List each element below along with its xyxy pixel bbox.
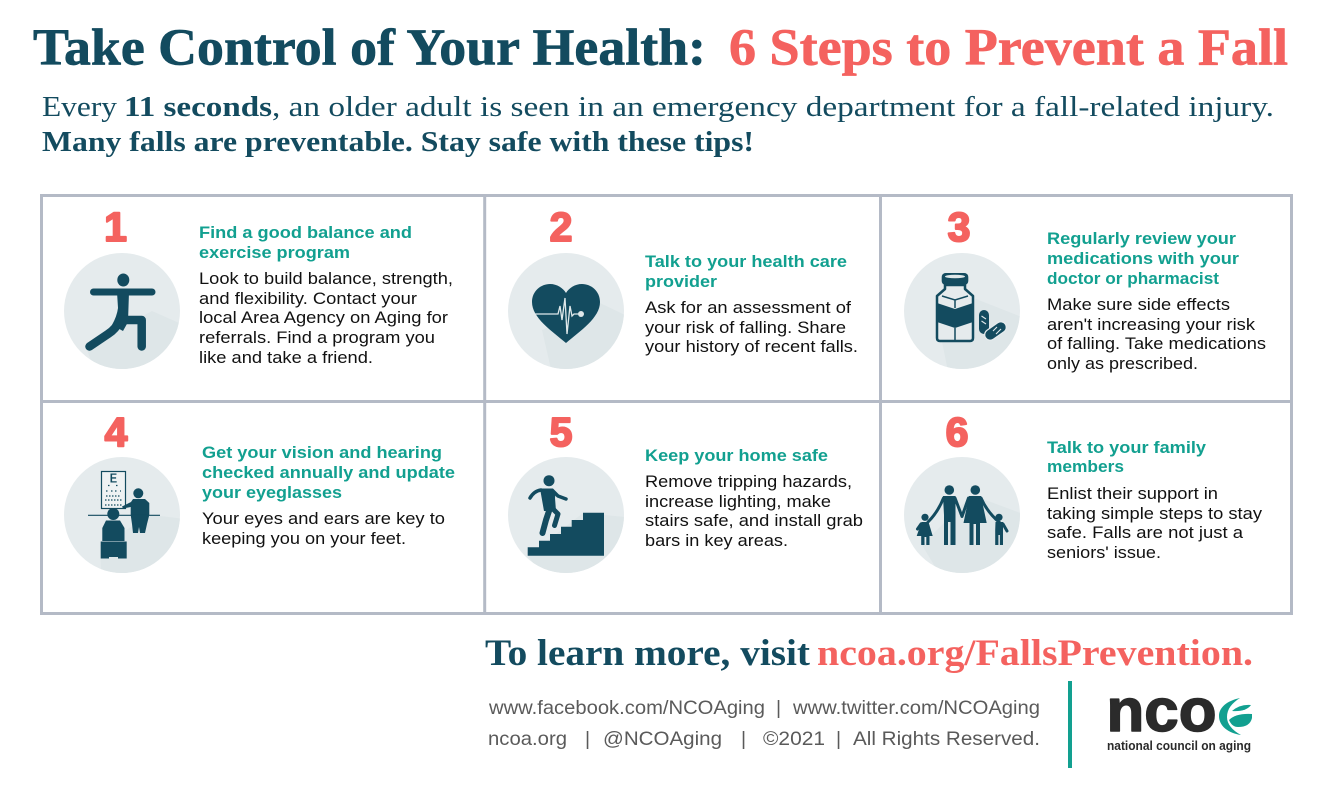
body text 3 [1047, 296, 1266, 373]
body text 2: your risk of falling. Share [645, 319, 846, 337]
body text 2 [645, 299, 858, 356]
heading 1: Find a good balance and [199, 224, 412, 242]
body text 6: seniors' issue. [1047, 544, 1161, 562]
body text 5: stairs safe, and install grab [645, 512, 863, 530]
icon: person climbing stairs [508, 457, 624, 573]
intro text: , an older adult is seen in an emergency department for a fall-related injury. [272, 92, 1274, 123]
body text 1: referrals. Find a program you [199, 329, 435, 347]
heading 6 [1047, 439, 1207, 476]
body text 1 [199, 270, 453, 367]
panel: step 1 balance and exercise [64, 212, 452, 369]
social links and copyright: | [836, 728, 841, 750]
body text 1: Look to build balance, strength, [199, 270, 453, 288]
intro text: Many falls are preventable. Stay safe with these tips! [42, 127, 754, 158]
logo divider [1068, 681, 1072, 768]
social links and copyright: @NCOAging [603, 728, 722, 750]
body text 4: Your eyes and ears are key to [202, 510, 445, 528]
heading 2: provider [645, 273, 718, 291]
body text 2: your history of recent falls. [645, 338, 858, 356]
body text 6 [1047, 485, 1263, 562]
social links and copyright: | [741, 728, 746, 750]
heading 6: members [1047, 458, 1124, 476]
heading 1 [199, 224, 412, 262]
heading 5: Keep your home safe [645, 447, 828, 465]
logo: NCOA: nco [1106, 677, 1216, 744]
body text 3: aren't increasing your risk [1047, 316, 1256, 334]
title [33, 20, 1288, 76]
heading 2: Talk to your health care [645, 253, 847, 271]
body text 5: increase lighting, make [645, 493, 831, 511]
heading 3: doctor or pharmacist [1047, 270, 1220, 288]
number 4: 4 [105, 409, 128, 455]
call to action: To learn more, visit [485, 633, 811, 674]
title: 6 Steps to Prevent a Fall [729, 20, 1288, 76]
icon: heart with pulse [508, 253, 624, 369]
logo: NCOA [1106, 677, 1252, 753]
body text 2: Ask for an assessment of [645, 299, 851, 317]
social links and copyright: www.twitter.com/NCOAging [792, 697, 1040, 719]
body text 6: taking simple steps to stay [1047, 505, 1263, 523]
social links and copyright: www.facebook.com/NCOAging [488, 697, 765, 719]
intro text: Every [42, 92, 117, 123]
heading 3: medications with your [1047, 250, 1240, 268]
number 3: 3 [948, 204, 970, 250]
social links and copyright [488, 697, 1040, 750]
panel: step 5 home safety [508, 417, 862, 573]
body text 3: only as prescribed. [1047, 355, 1198, 373]
call to action: ncoa.org/FallsPrevention. [817, 633, 1253, 674]
body text 1: like and take a friend. [199, 349, 373, 367]
body text 5: bars in key areas. [645, 532, 788, 550]
number 2: 2 [550, 204, 572, 250]
body text 3: Make sure side effects [1047, 296, 1230, 314]
heading 4: checked annually and update [202, 464, 455, 482]
body text 4: keeping you on your feet. [202, 530, 406, 548]
icon: family holding hands [904, 457, 1020, 573]
body text 1: and flexibility. Contact your [199, 290, 418, 308]
body text 5 [645, 473, 863, 550]
heading 1: exercise program [199, 244, 350, 262]
body text 6: Enlist their support in [1047, 485, 1218, 503]
heading 4: Get your vision and hearing [202, 444, 442, 462]
body text 3: of falling. Take medications [1047, 335, 1266, 353]
icon: pill bottle and capsules [904, 253, 1020, 369]
body text 6: safe. Falls are not just a [1047, 524, 1244, 542]
panel: step 3 medications [904, 212, 1266, 372]
social links and copyright: ©2021 [763, 728, 825, 750]
panel: step 4 vision and hearing [64, 417, 454, 573]
number 5: 5 [550, 409, 572, 455]
logo: NCOA: national council on aging [1107, 739, 1251, 753]
heading 4: your eyeglasses [202, 484, 342, 502]
social links and copyright: | [585, 728, 590, 750]
heading 2 [645, 253, 847, 291]
body text 1: local Area Agency on Aging for [199, 309, 449, 327]
panel: step 2 health care provider [508, 212, 856, 369]
call to action [485, 633, 1253, 674]
intro text: 11 seconds [124, 92, 272, 123]
heading 6: Talk to your family [1047, 439, 1207, 457]
number 6: 6 [946, 409, 968, 455]
heading 3 [1047, 230, 1240, 288]
heading 3: Regularly review your [1047, 230, 1237, 248]
panel: step 6 family [904, 416, 1262, 573]
heading 4 [202, 444, 455, 502]
icon: exercise pose [64, 253, 180, 369]
social links and copyright: All Rights Reserved. [853, 728, 1040, 750]
social links and copyright: | [776, 697, 781, 719]
number 1: 1 [104, 204, 127, 250]
intro text [42, 92, 1274, 158]
body text 5: Remove tripping hazards, [645, 473, 852, 491]
icon: eye exam [64, 457, 180, 573]
body text 4 [202, 510, 445, 548]
social links and copyright: ncoa.org [488, 728, 567, 750]
title: Take Control of Your Health: [33, 20, 706, 76]
